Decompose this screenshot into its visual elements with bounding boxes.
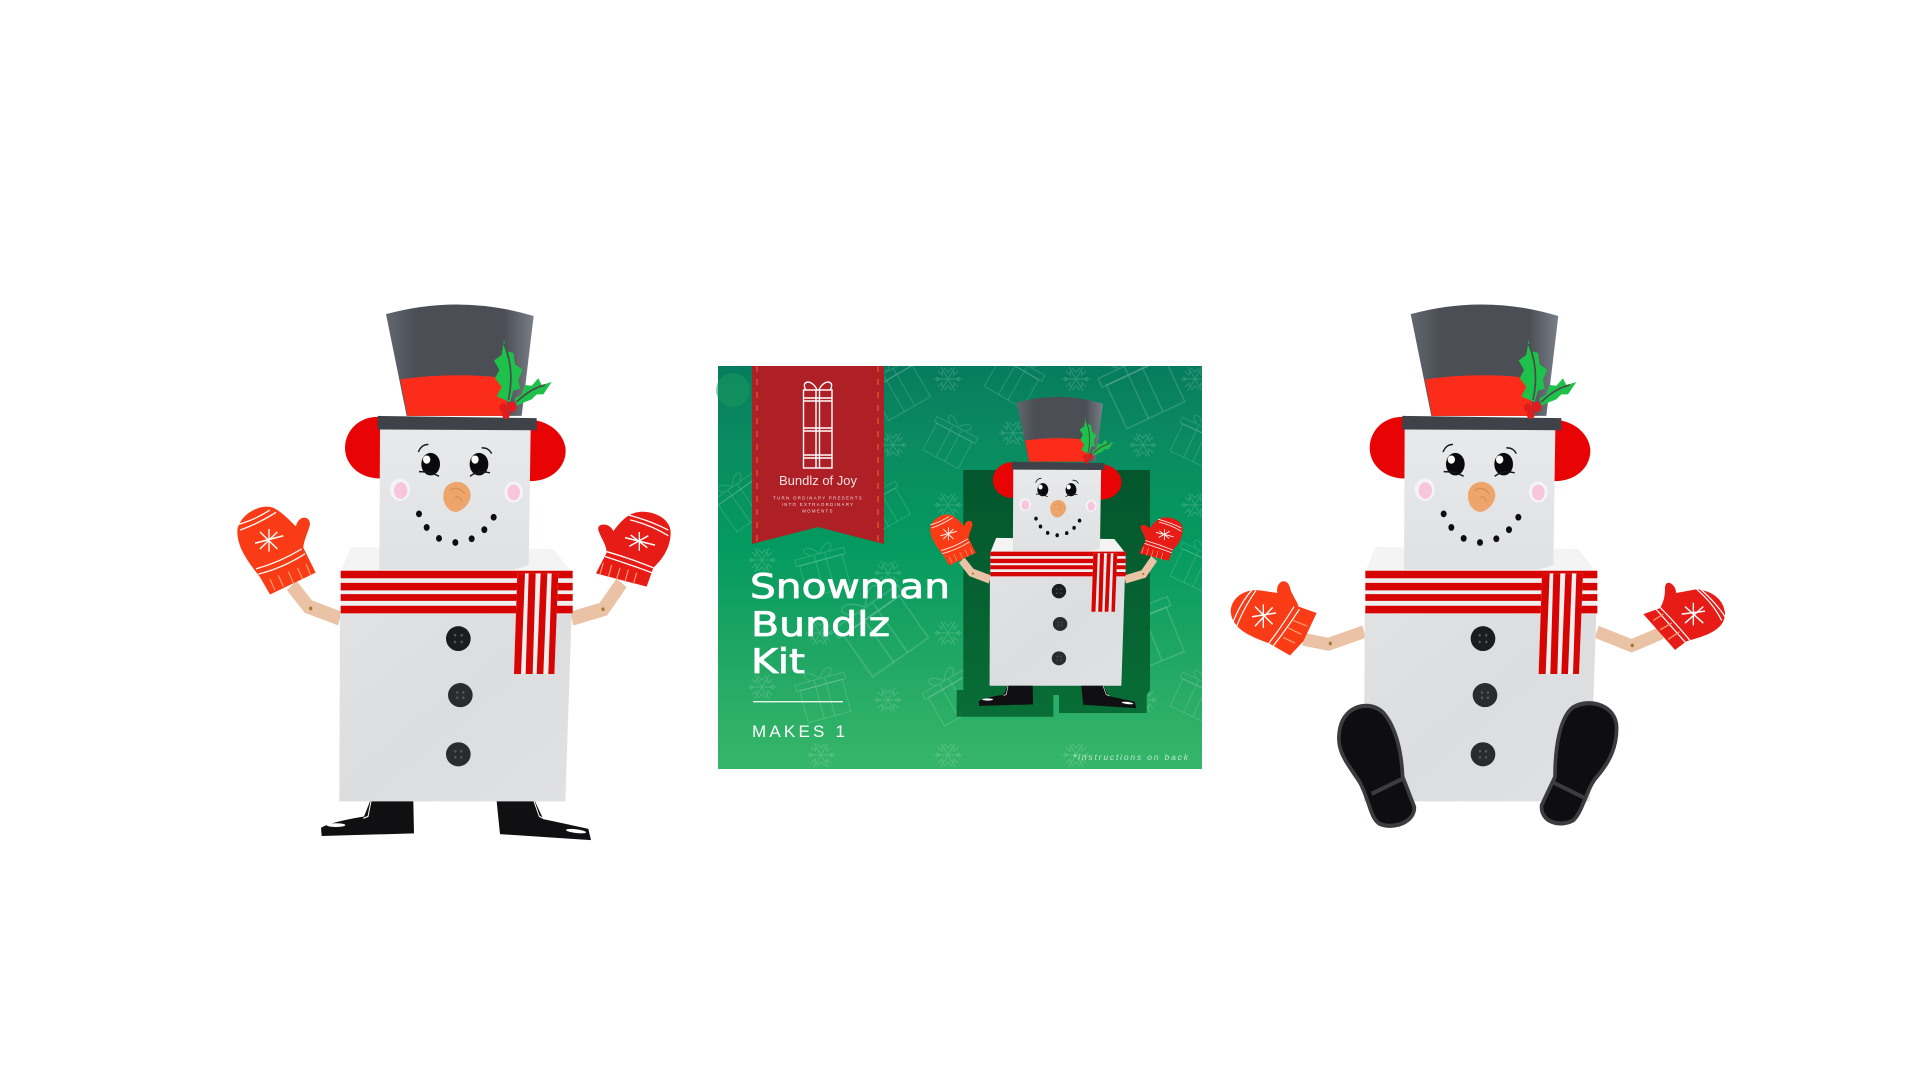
product title: Snowman (750, 567, 950, 607)
product box: Snowman Bundlz Kit (707, 336, 1228, 769)
box background (718, 366, 1202, 769)
title divider (753, 701, 843, 702)
background pattern of gifts and snowflakes (707, 336, 1228, 767)
left shoe sole (1339, 706, 1414, 826)
icon: tall wrapped gift (804, 382, 832, 468)
snowman body with hat, earmuffs, face, scarf and buttons (339, 304, 573, 801)
product title: Kit (751, 642, 805, 682)
right shoe sole (1542, 703, 1617, 823)
arms and mittens held out (1231, 581, 1725, 656)
snowman body with hat, earmuffs, face, scarf and buttons (1364, 304, 1597, 801)
brand tagline: MOMENTS (802, 508, 834, 514)
snowman arms and mittens raised (237, 507, 671, 619)
snowman photo on box (930, 397, 1183, 708)
product title (750, 567, 950, 682)
brand tagline: INTO EXTRAORDINARY (782, 502, 854, 507)
brand tagline (773, 496, 863, 514)
brand name: Bundlz of Joy (779, 473, 857, 488)
snowman standing (left) (237, 304, 671, 840)
red brand ribbon (752, 366, 884, 544)
dark green photo backing (957, 470, 1150, 717)
brand tagline: TURN ORDINARY PRESENTS (773, 496, 863, 500)
instructions note: *instructions on back (1073, 752, 1189, 762)
snowman sitting (right) (1231, 304, 1725, 826)
product title: Bundlz (751, 605, 890, 645)
makes 1 label: MAKES 1 (752, 722, 845, 741)
standing boots (321, 801, 591, 840)
